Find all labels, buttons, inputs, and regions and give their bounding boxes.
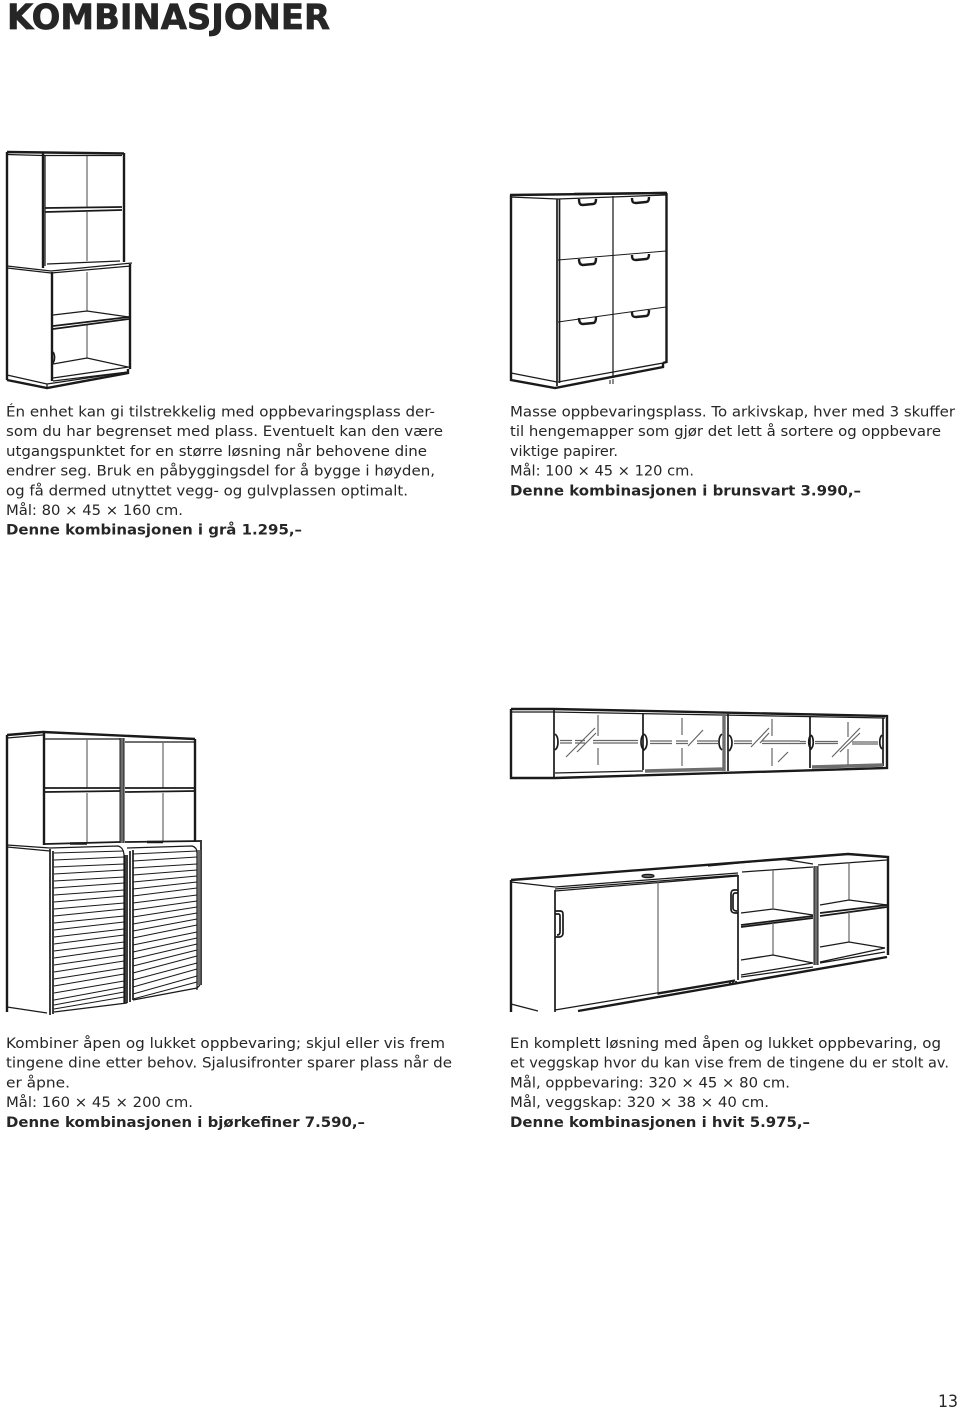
text: roller-shutter combination description [6, 1035, 452, 1131]
text: filing cabinet description: Denne kombinasjonen i brunsvart 3.990,– [510, 483, 861, 499]
text: roller-shutter combination description: tingene dine etter behov. Sjalusifronter sparer plass når de [6, 1055, 452, 1072]
illustration: shelves above roller-shutter cabinets [7, 732, 202, 1015]
illustration: filing cabinet with six drawers [510, 193, 667, 388]
text: tall shelving description: og få dermed utnyttet vegg- og gulvplassen optimalt. [6, 482, 408, 499]
illustration: wall cabinet with glass doors [511, 709, 887, 778]
text: filing cabinet description: Mål: 100 × 45 × 120 cm. [510, 463, 694, 480]
text: filing cabinet description: til hengemapper som gjør det lett å sortere og oppbevare [510, 423, 941, 440]
text: tall shelving description: utgangspunktet for en større løsning når behovene dine [6, 443, 427, 460]
text: roller-shutter combination description: er åpne. [6, 1074, 70, 1091]
text: tall shelving description: som du har begrenset med plass. Eventuelt kan den være [6, 424, 443, 440]
text: filing cabinet description: Masse oppbevaringsplass. To arkivskap, hver med 3 skuffer [510, 404, 955, 420]
text: sideboard and wall cabinet description: Denne kombinasjonen i hvit 5.975,– [510, 1115, 810, 1131]
text: filing cabinet description [510, 404, 955, 499]
text: sideboard and wall cabinet description: En komplett løsning med åpen og lukket oppbevaring, og [510, 1035, 941, 1052]
text: roller-shutter combination description: Mål: 160 × 45 × 200 cm. [6, 1094, 193, 1111]
text: roller-shutter combination description: Denne kombinasjonen i bjørkefiner 7.590,– [6, 1115, 365, 1131]
roller shutter slats: right cabinet [133, 851, 197, 999]
roller shutter slats: left cabinet [54, 851, 124, 1009]
text: tall shelving description: Mål: 80 × 45 × 160 cm. [6, 502, 183, 519]
illustration: tall open shelving unit [7, 152, 132, 388]
cable outlet [642, 874, 654, 878]
text: tall shelving description: endrer seg. Bruk en påbyggingsdel for å bygge i høyden, [6, 463, 435, 480]
text: sideboard and wall cabinet description: Mål, oppbevaring: 320 × 45 × 80 cm. [510, 1074, 790, 1091]
text: sideboard and wall cabinet description: Mål, veggskap: 320 × 38 × 40 cm. [510, 1094, 769, 1111]
handle: drawer pulls [579, 197, 649, 324]
text: filing cabinet description: viktige papirer. [510, 444, 618, 460]
text: tall shelving description: Denne kombinasjonen i grå 1.295,– [6, 522, 302, 539]
text: sideboard and wall cabinet description [510, 1035, 949, 1131]
handle: glass door finger grips [555, 734, 882, 751]
illustration: low sideboard with sliding doors and open shelves [511, 854, 888, 1012]
text: sideboard and wall cabinet description: et veggskap hvor du kan vise frem de tingene du er stolt av. [510, 1056, 949, 1072]
text: tall shelving description: Én enhet kan gi tilstrekkelig med oppbevaringsplass der- [6, 404, 435, 420]
handle: sliding door grips [555, 890, 738, 937]
text: roller-shutter combination description: Kombiner åpen og lukket oppbevaring; skjul eller vis frem [6, 1035, 445, 1052]
text: tall shelving description [6, 404, 443, 539]
